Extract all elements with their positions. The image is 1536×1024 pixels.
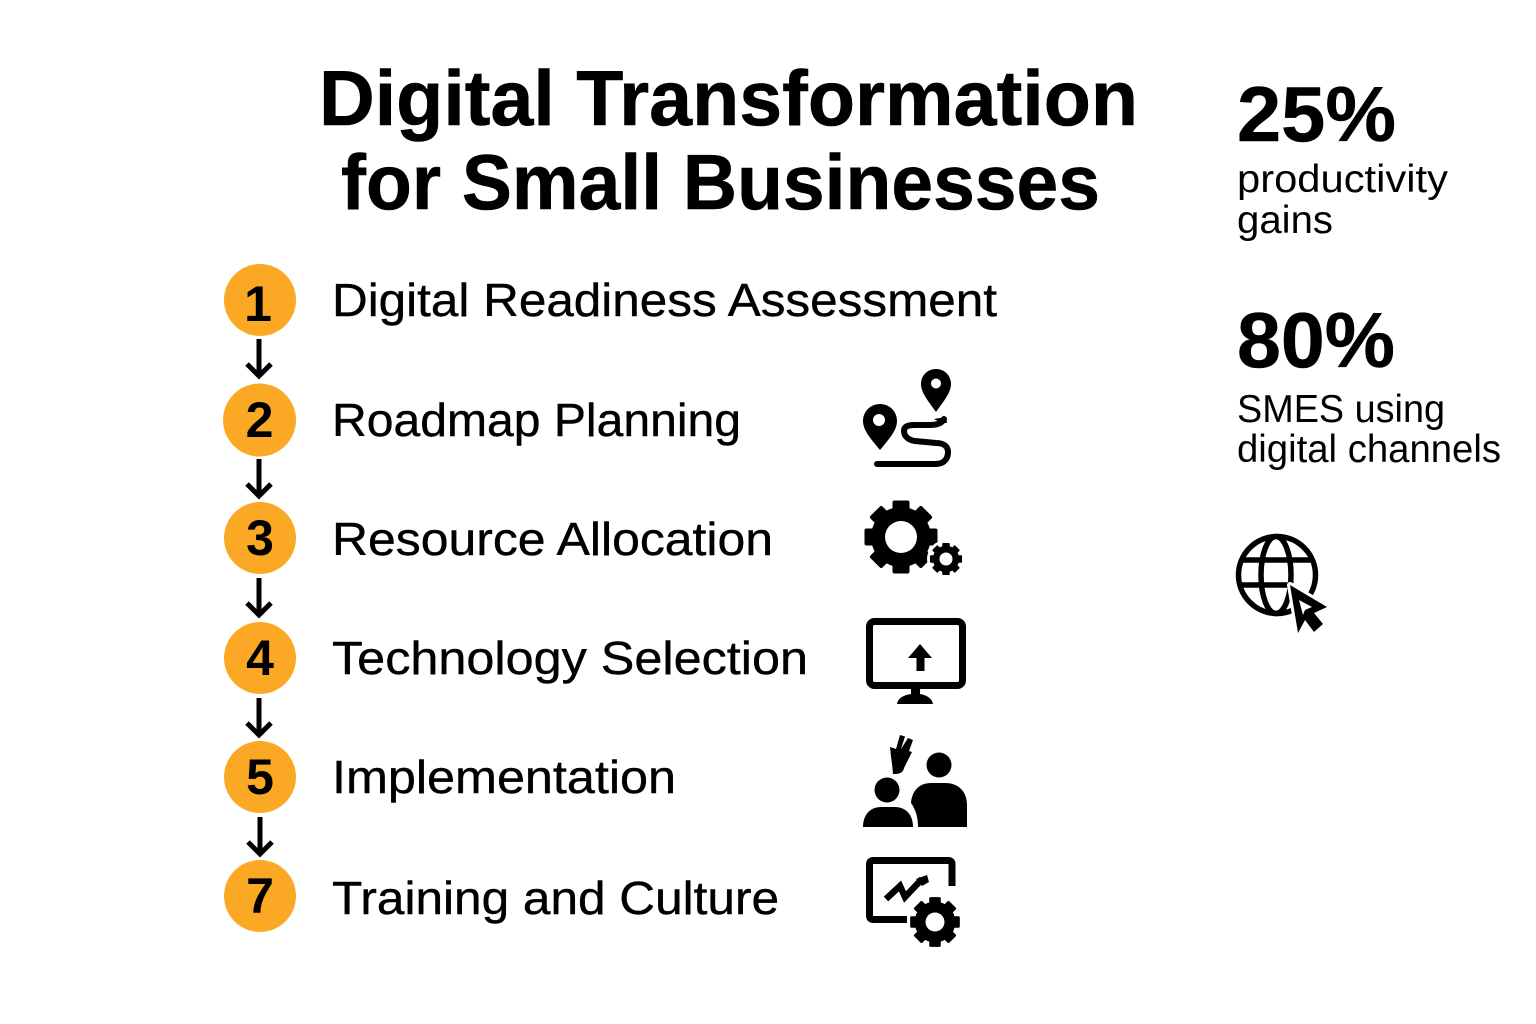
stat: 25% productivity gains: productivity: [1237, 158, 1449, 201]
title: [319, 54, 1138, 226]
stat: 80% SMES using digital channels: [1237, 296, 1501, 471]
arrow: step 4 to 5: [247, 698, 271, 735]
icon: chart screen with gear: [870, 860, 960, 947]
step 3: Resource Allocation: Resource Allocation: [332, 513, 773, 565]
icon: monitor with upload arrow: [870, 622, 962, 704]
step 5: Implementation: [224, 741, 676, 813]
step 4: Technology Selection: 4: [246, 630, 274, 686]
arrow: step 1 to 2: [247, 339, 271, 376]
icon: gears: [864, 500, 965, 578]
stat: 80% SMES using digital channels: 80%: [1237, 296, 1395, 384]
title: for Small Businesses: [341, 138, 1100, 226]
step 1: Digital Readiness Assessment: 1: [244, 276, 272, 332]
step 3: Resource Allocation: [224, 502, 773, 574]
stat: 25% productivity gains: gains: [1237, 199, 1333, 242]
icon: globe with cursor: [1238, 536, 1327, 633]
step 7: Training and Culture: [224, 860, 779, 932]
arrow: step 3 to 4: [247, 578, 271, 615]
arrow: step 2 to 3: [247, 459, 271, 496]
arrow: step 5 to 7: [248, 817, 272, 854]
step 1: Digital Readiness Assessment: Digital Readiness Assessment: [332, 274, 997, 326]
stat: 80% SMES using digital channels: SMES using: [1237, 388, 1445, 431]
step 7: Training and Culture: Training and Culture: [332, 872, 779, 924]
step 2: Roadmap Planning: 2: [246, 392, 273, 448]
step 3: Resource Allocation: 3: [246, 510, 274, 566]
step 5: Implementation: Implementation: [332, 751, 676, 803]
step 4: Technology Selection: [224, 622, 808, 694]
step 7: Training and Culture: 7: [246, 868, 274, 924]
stat: 25% productivity gains: [1237, 70, 1449, 242]
step 4: Technology Selection: Technology Selection: [332, 632, 808, 684]
step 2: Roadmap Planning: [223, 384, 741, 456]
stat: 80% SMES using digital channels: digital channels: [1237, 428, 1501, 471]
icon: route map with pins: [863, 369, 951, 464]
step 5: Implementation: 5: [246, 749, 274, 805]
icon: people with raised hand: [863, 735, 967, 827]
stat: 25% productivity gains: 25%: [1237, 70, 1396, 158]
title: Digital Transformation: [319, 54, 1138, 142]
step 2: Roadmap Planning: Roadmap Planning: [332, 394, 741, 446]
step 1: Digital Readiness Assessment: [224, 264, 997, 336]
